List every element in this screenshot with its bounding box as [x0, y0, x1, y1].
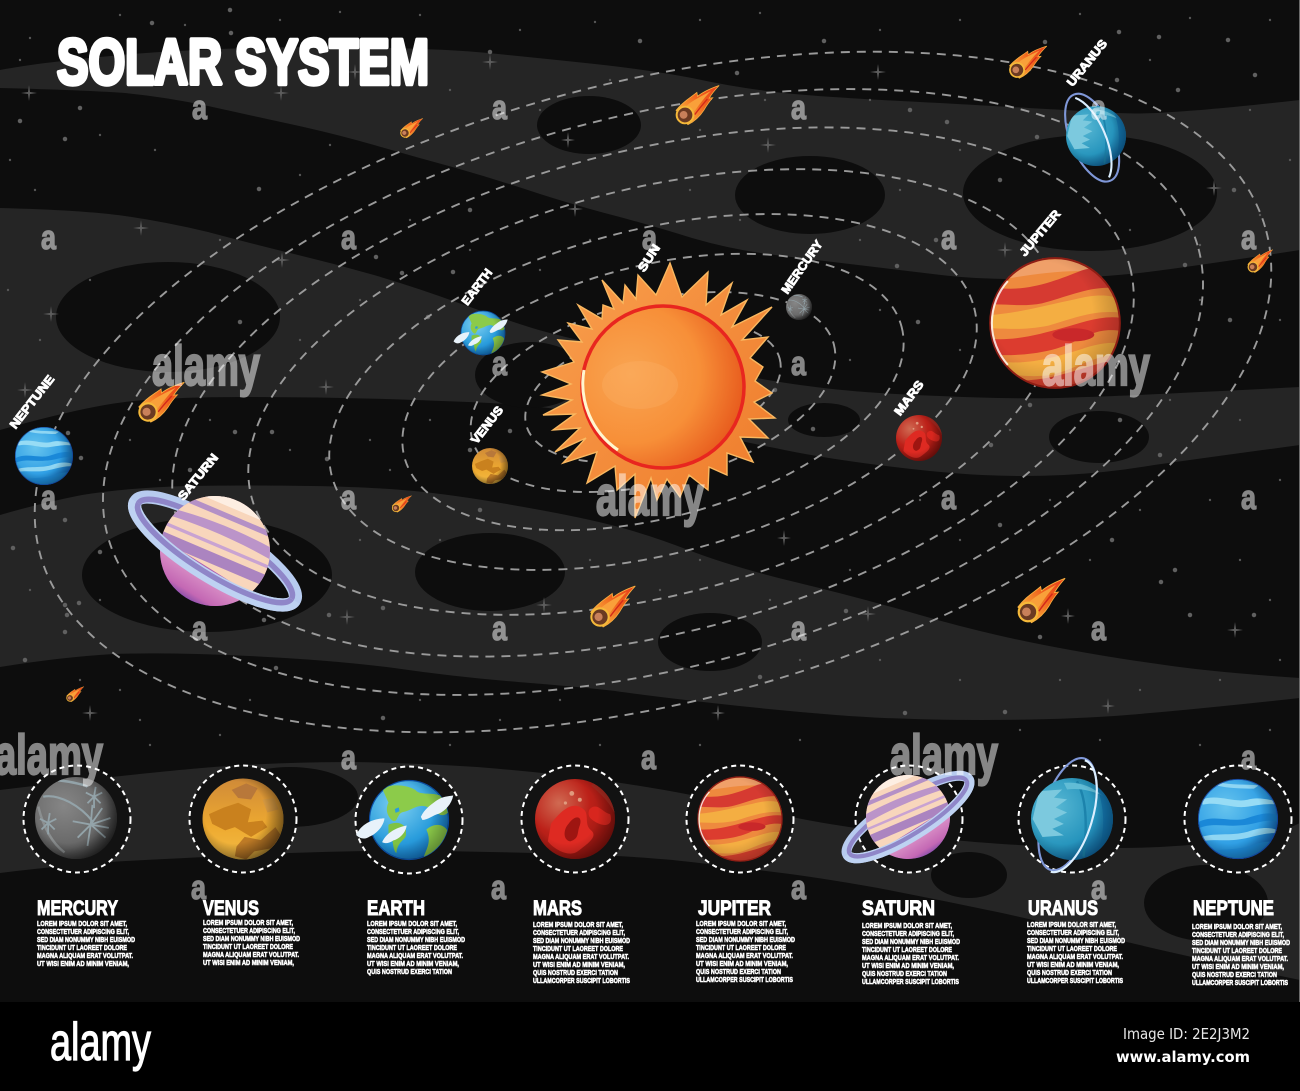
watermark letters: a: [491, 869, 507, 907]
planet row: Saturn: [821, 737, 995, 898]
text block: Neptune: [1192, 897, 1290, 987]
watermark letters: a: [192, 89, 208, 127]
body: Neptune: [1192, 922, 1290, 987]
dark craters on the bands: [56, 96, 1268, 941]
body: Jupiter: ULLAMCORPER SUSCIPIT LOBORTIS: [696, 975, 793, 984]
watermark words: alamy: [596, 464, 704, 527]
watermark words: alamy: [890, 723, 998, 786]
comet 8: [64, 684, 87, 704]
planet: Mercury (orbit): [786, 294, 812, 320]
sun disc: [582, 306, 744, 468]
body: Saturn: MAGNA ALIQUAM ERAT VOLUTPAT.: [862, 953, 959, 962]
body: Earth: QUIS NOSTRUD EXERCI TATION: [367, 967, 452, 976]
watermark letters: a: [642, 219, 658, 257]
watermark letters: a: [941, 219, 957, 257]
body: Mars: UT WISI ENIM AD MINIM VENIAM,: [533, 960, 625, 969]
planet: Jupiter (orbit): [990, 258, 1120, 388]
body: Venus: CONSECTETUER ADIPISCING ELIT,: [203, 926, 295, 935]
footer strip: [0, 1002, 1300, 1091]
planet row: Jupiter: [698, 776, 782, 862]
watermark letters: a: [1091, 869, 1107, 907]
planet row: Venus: [202, 778, 284, 860]
planet: Uranus (orbit): [1054, 86, 1130, 189]
body: Mars: MAGNA ALIQUAM ERAT VOLUTPAT.: [533, 952, 629, 961]
body: Jupiter: UT WISI ENIM AD MINIM VENIAM,: [696, 959, 788, 968]
body: Mercury: SED DIAM NONUMMY NIBH EUISMOD: [37, 935, 135, 944]
body: Saturn: ULLAMCORPER SUSCIPIT LOBORTIS: [862, 977, 959, 986]
planet row: Earth: [356, 780, 453, 860]
body: Venus: LOREM IPSUM DOLOR SIT AMET,: [203, 918, 293, 927]
body: Jupiter: CONSECTETUER ADIPISCING ELIT,: [696, 927, 788, 936]
text block: Earth: [367, 897, 465, 976]
body: Saturn: UT WISI ENIM AD MINIM VENIAM,: [862, 961, 954, 970]
body: Venus: SED DIAM NONUMMY NIBH EUISMOD: [203, 934, 300, 943]
label: Earth: EARTH: [459, 266, 495, 308]
label: Mars: MARS: [891, 378, 927, 418]
planet row: dashed circles: [24, 766, 1292, 874]
body: Earth: CONSECTETUER ADIPISCING ELIT,: [367, 927, 459, 936]
website: www.alamy.com: [1116, 1048, 1250, 1066]
body: Mercury: [37, 919, 135, 968]
title: SOLAR SYSTEM: [57, 26, 429, 98]
label: Sun: SUN: [635, 242, 663, 274]
body: Jupiter: SED DIAM NONUMMY NIBH EUISMOD: [696, 935, 795, 944]
body: Venus: TINCIDUNT UT LAOREET DOLORE: [203, 942, 293, 951]
body: Mars: [533, 920, 630, 985]
label: Saturn: SATURN: [175, 451, 221, 503]
comet 9: [1012, 570, 1073, 627]
text block: Jupiter: [696, 897, 795, 984]
body: Earth: LOREM IPSUM DOLOR SIT AMET,: [367, 919, 457, 928]
sparkle stars: [17, 54, 1243, 721]
body: Saturn: [862, 921, 960, 986]
watermark letters: a: [1241, 479, 1257, 517]
body: Saturn: CONSECTETUER ADIPISCING ELIT,: [862, 929, 954, 938]
text block: Uranus: [1027, 897, 1125, 985]
label: Neptune: NEPTUNE: [7, 372, 57, 432]
watermark letters: a: [341, 479, 357, 517]
body: Uranus: QUIS NOSTRUD EXERCI TATION: [1027, 968, 1112, 977]
body: Mars: ULLAMCORPER SUSCIPIT LOBORTIS: [533, 976, 630, 985]
watermark letters: a: [191, 869, 207, 907]
body: Earth: TINCIDUNT UT LAOREET DOLORE: [367, 943, 457, 952]
watermark letters: a: [41, 479, 57, 517]
heading: Earth: EARTH: [367, 897, 425, 920]
dashed orbits: [0, 0, 1300, 853]
watermark letters: a: [1241, 219, 1257, 257]
watermark letters: a: [791, 345, 807, 383]
comet 3: [398, 115, 426, 140]
watermark letters: a: [341, 739, 357, 777]
watermark letters: a: [41, 219, 57, 257]
body: Uranus: MAGNA ALIQUAM ERAT VOLUTPAT.: [1027, 952, 1123, 961]
watermark letters: a: [492, 610, 508, 648]
watermark letters: a: [1091, 610, 1107, 648]
label: Uranus: URANUS: [1064, 37, 1110, 89]
heading: Mercury: MERCURY: [37, 897, 118, 920]
planet row: Uranus: [1027, 751, 1113, 879]
heading: Uranus: URANUS: [1028, 897, 1098, 920]
star field: [8, 10, 1300, 745]
heading: Neptune: NEPTUNE: [1193, 897, 1274, 920]
comets: [64, 40, 1277, 704]
planet row: Mercury: [35, 777, 117, 859]
body: Jupiter: TINCIDUNT UT LAOREET DOLORE: [696, 943, 786, 952]
label: Jupiter: JUPITER: [1017, 207, 1064, 259]
body: Mercury: UT WISI ENIM AD MINIM VENIAM,: [37, 959, 129, 968]
sun: [542, 263, 775, 518]
body: Saturn: LOREM IPSUM DOLOR SIT AMET,: [862, 921, 952, 930]
watermark letters: a: [941, 479, 957, 517]
body: Earth: MAGNA ALIQUAM ERAT VOLUTPAT.: [367, 951, 463, 960]
comet 1: [671, 78, 726, 129]
text block: Venus: [203, 897, 300, 967]
planet row: Neptune: [1198, 779, 1278, 859]
body: Mars: LOREM IPSUM DOLOR SIT AMET,: [533, 920, 623, 929]
watermark words: alamy: [1042, 334, 1150, 397]
watermark letters: a: [192, 610, 208, 648]
planet: Saturn (orbit): [101, 447, 329, 657]
watermark letters: a: [791, 610, 807, 648]
footer logo: alamy: [50, 1013, 151, 1072]
body: Uranus: UT WISI ENIM AD MINIM VENIAM,: [1027, 960, 1119, 969]
heading: Mars: MARS: [533, 897, 582, 920]
planet: Neptune (orbit): [15, 427, 73, 485]
body: Uranus: ULLAMCORPER SUSCIPIT LOBORTIS: [1027, 976, 1123, 985]
body: Mercury: MAGNA ALIQUAM ERAT VOLUTPAT.: [37, 951, 133, 960]
watermark letters: a: [341, 219, 357, 257]
heading: Jupiter: JUPITER: [698, 897, 771, 920]
body: Mars: SED DIAM NONUMMY NIBH EUISMOD: [533, 936, 630, 945]
label: Venus: VENUS: [468, 403, 506, 447]
body: Mercury: CONSECTETUER ADIPISCING ELIT,: [37, 927, 129, 936]
planet: Mars (orbit): [896, 415, 942, 461]
sun highlight: [583, 370, 618, 450]
text block: Mercury: [37, 897, 135, 968]
heading: Saturn: SATURN: [862, 897, 935, 920]
body: Mars: TINCIDUNT UT LAOREET DOLORE: [533, 944, 623, 953]
watermark letters: a: [1091, 89, 1107, 127]
body: Jupiter: LOREM IPSUM DOLOR SIT AMET,: [696, 919, 786, 928]
body: Earth: [367, 919, 465, 976]
text block: Saturn: [862, 897, 960, 986]
comet 4: [1245, 245, 1277, 275]
body: Venus: MAGNA ALIQUAM ERAT VOLUTPAT.: [203, 950, 299, 959]
body: Venus: [203, 918, 300, 967]
body: Uranus: TINCIDUNT UT LAOREET DOLORE: [1027, 944, 1117, 953]
planet row: Mars: [535, 779, 615, 859]
comet 6: [390, 492, 415, 514]
text block: Mars: [533, 897, 630, 985]
watermark letters: a: [492, 345, 508, 383]
body: Jupiter: QUIS NOSTRUD EXERCI TATION: [696, 967, 781, 976]
body: Mercury: LOREM IPSUM DOLOR SIT AMET,: [37, 919, 127, 928]
comet 7: [586, 578, 643, 631]
watermark letters: a: [492, 89, 508, 127]
sun rays: [542, 263, 775, 518]
body: Uranus: CONSECTETUER ADIPISCING ELIT,: [1027, 928, 1119, 937]
heading: Venus: VENUS: [203, 897, 259, 920]
watermark letters: a: [1241, 739, 1257, 777]
body: Saturn: QUIS NOSTRUD EXERCI TATION: [862, 969, 947, 978]
watermark words: [0, 334, 1150, 786]
body: Earth: SED DIAM NONUMMY NIBH EUISMOD: [367, 935, 465, 944]
body: Uranus: LOREM IPSUM DOLOR SIT AMET,: [1027, 920, 1116, 929]
comet 5: [134, 374, 192, 426]
body: Venus: UT WISI ENIM AD MINIM VENIAM,: [203, 958, 294, 967]
body: Saturn: TINCIDUNT UT LAOREET DOLORE: [862, 945, 952, 954]
watermark letters: a: [641, 739, 657, 777]
right edge hairline: [1299, 0, 1300, 1002]
watermark words: alamy: [152, 334, 260, 397]
watermark letters: a: [791, 89, 807, 127]
comet 2: [1005, 40, 1053, 82]
image id: Image ID: 2E2J3M2: [1123, 1025, 1250, 1043]
label: Mercury: MERCURY: [778, 238, 826, 296]
body: Jupiter: [696, 919, 795, 984]
body: Saturn: SED DIAM NONUMMY NIBH EUISMOD: [862, 937, 960, 946]
body: Uranus: [1027, 920, 1125, 985]
body: Mars: QUIS NOSTRUD EXERCI TATION: [533, 968, 618, 977]
planet: Venus (orbit): [472, 448, 508, 484]
watermark letters: [41, 89, 1257, 907]
body: Earth: UT WISI ENIM AD MINIM VENIAM,: [367, 959, 459, 968]
body: Mercury: TINCIDUNT UT LAOREET DOLORE: [37, 943, 127, 952]
planet: Earth (orbit): [454, 311, 508, 355]
orbit labels: [7, 37, 1110, 503]
body: Mars: CONSECTETUER ADIPISCING ELIT,: [533, 928, 625, 937]
body: Uranus: SED DIAM NONUMMY NIBH EUISMOD: [1027, 936, 1125, 945]
watermark letters: a: [791, 869, 807, 907]
body: Jupiter: MAGNA ALIQUAM ERAT VOLUTPAT.: [696, 951, 793, 960]
